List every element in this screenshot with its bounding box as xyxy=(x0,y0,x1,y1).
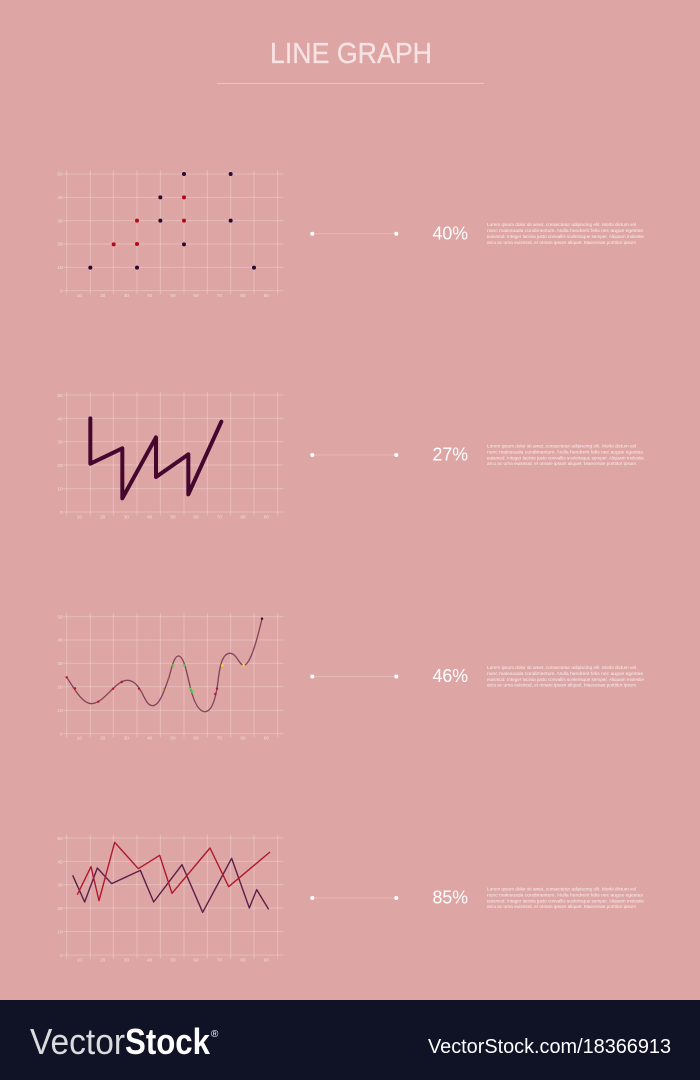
chart: smooth curve with coloured points: 60 xyxy=(193,736,199,741)
chart: smooth curve with coloured points: 80 xyxy=(240,736,246,741)
chart: dark and red line series: 80 xyxy=(240,957,246,962)
chart: thick zigzag line: 20 xyxy=(100,514,106,519)
chart: dark and red line series: 40 xyxy=(57,859,63,864)
chart: thick zigzag line: 20 xyxy=(57,463,63,468)
description text: euismod. Integer lacinia justo convallis scelerisque semper. Aliquam molestie xyxy=(487,898,644,903)
chart: smooth curve with coloured points: 30 xyxy=(124,736,129,741)
description text: nunc malesuada condimentum. Nulla hendrerit felis nec augue egestas xyxy=(487,228,644,233)
chart: thick zigzag line xyxy=(57,392,283,519)
chart: scatter dots: 50 xyxy=(170,293,176,298)
chart: dark and red line series: 0 xyxy=(60,953,63,958)
title: LINE GRAPH xyxy=(270,38,432,70)
chart: scatter dots: 20 xyxy=(100,293,106,298)
chart: smooth curve with coloured points: 40 xyxy=(147,736,153,741)
chart: dark and red line series: 10 xyxy=(77,957,82,962)
description text: euismod. Integer lacinia justo convallis scelerisque semper. Aliquam molestie xyxy=(487,234,644,239)
chart: smooth curve with coloured points: 20 xyxy=(57,684,63,689)
percentage: 46% xyxy=(432,665,468,686)
chart: scatter dots: 60 xyxy=(193,293,199,298)
chart: thick zigzag line: 90 xyxy=(264,514,269,519)
chart: dark and red line series: 40 xyxy=(147,957,153,962)
panel: row 3 smooth curve chart xyxy=(57,613,644,741)
chart: scatter dots: 0 xyxy=(60,288,63,293)
chart: thick zigzag line: 40 xyxy=(57,416,63,421)
description text: nunc malesuada condimentum. Nulla hendrerit felis nec augue egestas xyxy=(487,450,644,454)
chart: scatter dots: 30 xyxy=(57,218,63,223)
chart: scatter dots: 10 xyxy=(57,265,63,270)
description text: euismod. Integer lacinia justo convallis scelerisque semper. Aliquam molestie xyxy=(487,455,644,460)
chart: dark and red line series: 20 xyxy=(100,957,106,962)
chart: scatter dots: 40 xyxy=(57,195,63,200)
description text xyxy=(487,222,644,245)
panel: row 4 two-series line chart xyxy=(57,835,644,962)
chart: scatter dots: 40 xyxy=(147,293,153,298)
chart: dark and red line series: 10 xyxy=(57,929,63,934)
panel: row 2 thick line chart xyxy=(57,392,644,519)
description text: euismod. Integer lacinia justo convallis scelerisque semper. Aliquam molestie xyxy=(487,677,644,682)
chart: smooth curve with coloured points: 50 xyxy=(170,736,176,741)
chart: smooth curve with coloured points: 0 xyxy=(60,731,63,736)
image id text: VectorStock.com/18366913 xyxy=(428,1036,671,1058)
chart: dark and red line series: 50 xyxy=(57,836,63,841)
chart: thick zigzag line: 0 xyxy=(60,510,63,515)
chart: thick zigzag line: 50 xyxy=(57,393,63,398)
description text: nunc malesuada condimentum. Nulla hendrerit felis nec augue egestas xyxy=(487,892,644,898)
description text: arcu ac urna euismod, et ornare ipsum aliquet. Maecenas porttitor ipsum xyxy=(487,240,636,245)
chart: thick zigzag line: 30 xyxy=(57,440,63,445)
logo: VectorStock wordmark xyxy=(30,1021,219,1062)
chart: thick zigzag line: 30 xyxy=(124,514,129,519)
chart: thick zigzag line: 40 xyxy=(147,514,153,519)
percentage: 27% xyxy=(432,444,468,465)
chart: thick zigzag line: 10 xyxy=(57,486,63,491)
connector xyxy=(310,232,398,236)
chart: smooth curve with coloured points: 20 xyxy=(100,736,106,741)
chart: dark and red line series: 50 xyxy=(170,957,176,962)
chart: thick zigzag line: 70 xyxy=(217,514,222,519)
connector xyxy=(310,896,398,900)
chart: dark and red line series: 20 xyxy=(57,906,63,911)
percentage: 85% xyxy=(432,887,468,908)
chart: scatter dots: 50 xyxy=(57,172,63,177)
description text: arcu ac urna euismod, et ornare ipsum aliquet. Maecenas porttitor ipsum xyxy=(487,461,636,466)
chart: thick zigzag line: 60 xyxy=(193,514,199,519)
chart: dark and red line series: 70 xyxy=(217,957,222,962)
connector xyxy=(310,453,398,457)
description text: Lorem ipsum dolor sit amet, consectetur adipiscing elit. Morbi dictum vel xyxy=(487,886,636,892)
chart: thick zigzag line: 10 xyxy=(77,514,82,519)
chart: smooth curve with coloured points: 30 xyxy=(57,661,63,666)
chart: dark and red line series: 30 xyxy=(124,957,129,962)
footer bar xyxy=(0,1000,700,1080)
chart: smooth curve with coloured points xyxy=(57,613,283,741)
description text: arcu ac urna euismod, et ornare ipsum aliquet. Maecenas porttitor ipsum xyxy=(487,683,636,688)
description text: Lorem ipsum dolor sit amet, consectetur adipiscing elit. Morbi dictum vel xyxy=(487,444,636,448)
panel: row 1 scatter plot xyxy=(57,170,644,298)
chart: smooth curve with coloured points: 40 xyxy=(57,638,63,643)
chart: dark and red line series: 60 xyxy=(193,957,199,962)
description text xyxy=(487,665,644,688)
chart: scatter dots: 80 xyxy=(240,293,246,298)
chart: smooth curve with coloured points: 50 xyxy=(57,614,63,619)
description text xyxy=(487,444,644,466)
chart: smooth curve with coloured points: 10 xyxy=(57,708,63,713)
chart: scatter dots: 70 xyxy=(217,293,222,298)
chart: thick zigzag line: 50 xyxy=(170,514,176,519)
chart: smooth curve with coloured points: 90 xyxy=(264,736,269,741)
connector xyxy=(310,674,398,678)
description text: nunc malesuada condimentum. Nulla hendrerit felis nec augue egestas xyxy=(487,671,644,676)
chart: smooth curve with coloured points: 10 xyxy=(77,736,82,741)
chart: scatter dots: 10 xyxy=(77,293,82,298)
logo: VectorStock wordmark: ® xyxy=(211,1029,219,1040)
chart: thick zigzag line: 80 xyxy=(240,514,246,519)
description text: Lorem ipsum dolor sit amet, consectetur adipiscing elit. Morbi dictum vel xyxy=(487,222,636,227)
logo: VectorStock wordmark: Stock xyxy=(125,1021,211,1062)
description text xyxy=(487,886,644,909)
description text: arcu ac urna euismod, et ornare ipsum aliquet. Maecenas porttitor ipsum xyxy=(487,904,636,909)
description text: Lorem ipsum dolor sit amet, consectetur adipiscing elit. Morbi dictum vel xyxy=(487,665,636,670)
chart: scatter dots: 30 xyxy=(124,293,129,298)
chart: scatter dots: 20 xyxy=(57,242,63,247)
chart: dark and red line series xyxy=(57,835,283,962)
chart: dark and red line series: 90 xyxy=(264,957,269,962)
logo: VectorStock wordmark: Vector xyxy=(30,1021,125,1062)
chart: scatter dots: 90 xyxy=(264,293,269,298)
chart: smooth curve with coloured points: 70 xyxy=(217,736,222,741)
chart: dark and red line series: 30 xyxy=(57,883,63,888)
percentage: 40% xyxy=(432,222,468,243)
chart: scatter dots xyxy=(57,170,283,298)
